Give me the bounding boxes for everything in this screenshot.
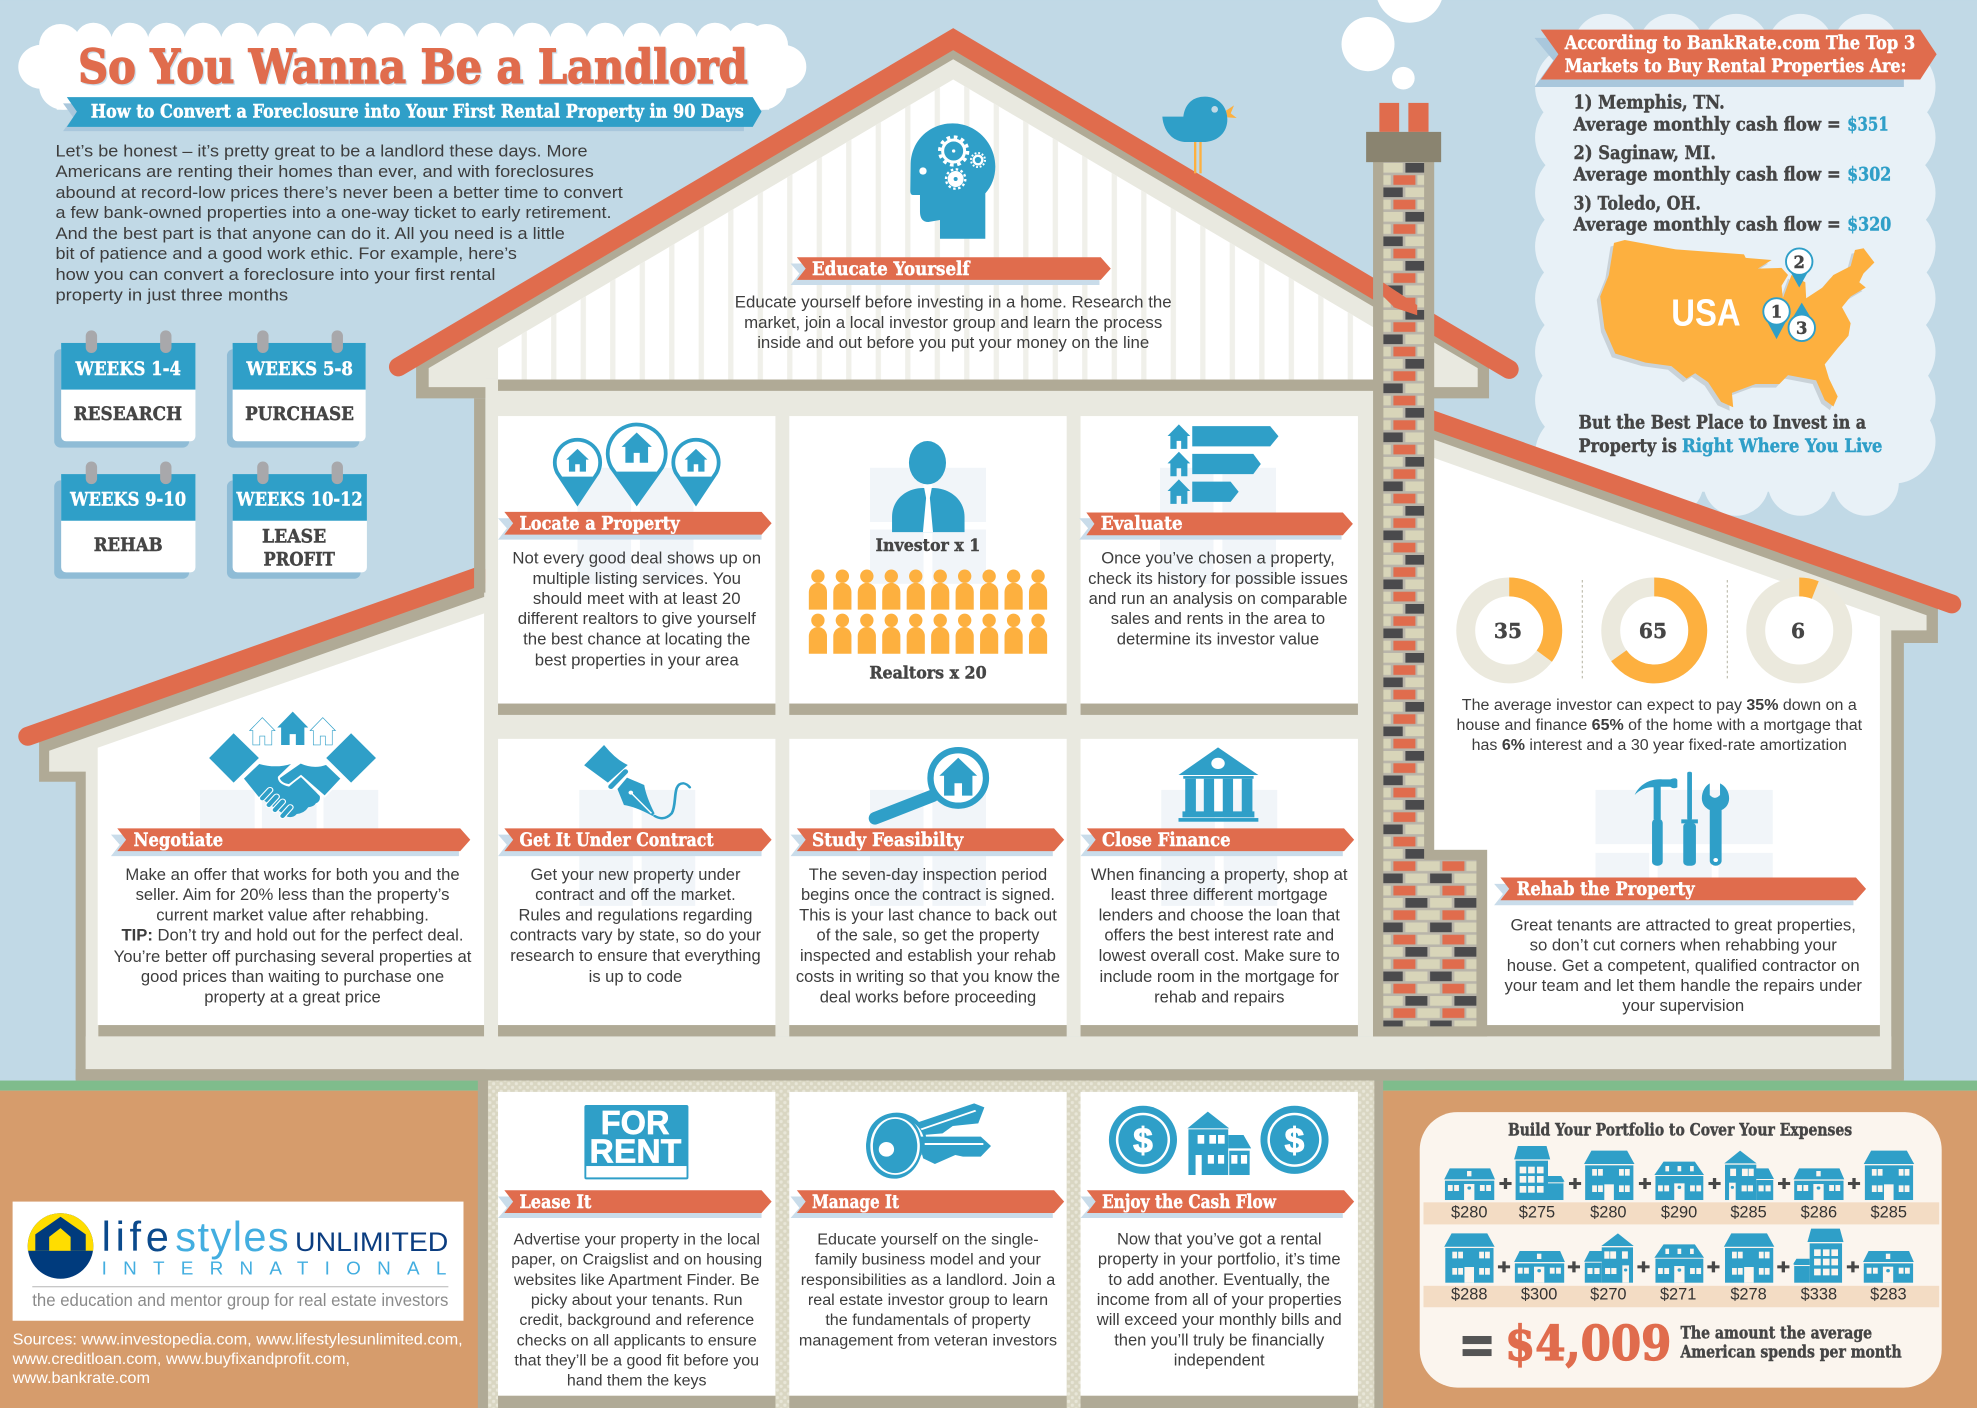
- text: best place to invest: Property is: [1579, 435, 1677, 457]
- ribbon: lease it: [498, 1190, 772, 1218]
- smoke puffs: [1342, 0, 1444, 90]
- ribbon: educate yourself: Educate Yourself: [812, 259, 971, 280]
- logo: lifestyles unlimited: the education and mentor group for real estate investors: [32, 1290, 449, 1310]
- text: negotiate: good prices than waiting to purchase one: [141, 967, 444, 986]
- cloud: top markets background: [1535, 14, 1936, 516]
- icon: keys: [866, 1103, 991, 1179]
- list: markets and cash flow: Average monthly cash flow =: [1573, 163, 1841, 185]
- donut: 6: 6: [1791, 619, 1805, 643]
- icon: for rent sign: FOR: [601, 1105, 670, 1142]
- donut: 35: 35: [1494, 619, 1522, 643]
- text: manage it: real estate investor group to learn: [808, 1291, 1048, 1309]
- pin: 2: [1786, 248, 1812, 287]
- prices: row two: $283: [1870, 1285, 1907, 1303]
- logo: lifestyles unlimited: [13, 1202, 463, 1321]
- text: close finance: rehab and repairs: [1154, 987, 1284, 1006]
- prices: row one: $280: [1590, 1203, 1627, 1221]
- text: negotiate: current market value after rehabbing.: [156, 905, 429, 924]
- ribbon: top markets heading: [1534, 30, 1937, 87]
- title cloud: [18, 23, 806, 110]
- ribbon: get it under contract: [498, 828, 772, 856]
- text: lease it: hand them the keys: [567, 1373, 707, 1390]
- text: best place to invest: Right Where You Live: [1682, 435, 1882, 457]
- prices: row two: $271: [1660, 1285, 1696, 1303]
- calendar: weeks 1-4 research: [54, 330, 195, 448]
- panel: lease it: [498, 1092, 775, 1408]
- subtitle ribbon: How to Convert a Foreclosure into Your First Rental Property in 90 Days: [91, 101, 744, 122]
- calendar: weeks 10-12 lease profit: PROFIT: [264, 549, 335, 571]
- house: right wing: [1425, 417, 1952, 1079]
- calendar: weeks 1-4 research: WEEKS 1-4: [75, 358, 181, 380]
- text: get it under contract: contract and off the market.: [535, 886, 736, 904]
- panel: educate yourself: [735, 123, 1172, 352]
- text: mortgage explanation: has 6% interest and a 30 year fixed-rate amortization: [1472, 737, 1847, 754]
- panel: enjoy the cash flow: [1081, 1092, 1358, 1408]
- text: enjoy the cash flow: Now that you’ve got a rental: [1117, 1230, 1322, 1248]
- text: enjoy the cash flow: then you’ll truly be financially: [1114, 1331, 1325, 1349]
- icon: location pins: [555, 424, 719, 506]
- text: evaluate: sales and rents in the area to: [1111, 609, 1325, 628]
- total: equals $4,009: $4,009: [1505, 1316, 1671, 1372]
- text: educate yourself: Educate yourself before investing in a home. Research the: [735, 293, 1172, 312]
- ribbon: educate yourself: [791, 257, 1111, 285]
- icon: bird: [1162, 97, 1237, 173]
- icon: coins and house: $: [1285, 1121, 1305, 1160]
- logo: lifestyles unlimited: life: [102, 1213, 169, 1260]
- pin: 2: 2: [1794, 253, 1805, 272]
- icon: head with gears: [910, 123, 995, 239]
- text: locate a property: the best chance at locating the: [523, 629, 750, 648]
- panel: top rental markets: [1534, 30, 1937, 457]
- ribbon: study feasibility: Study Feasibilty: [812, 830, 965, 851]
- text: educate yourself: inside and out before you put your money on the line: [757, 333, 1149, 352]
- text: rehab the property: your team and let them handle the repairs under: [1504, 976, 1862, 995]
- text: lease it: that they’ll be a good fit before you: [514, 1353, 759, 1370]
- prices: row one: $285: [1871, 1203, 1907, 1221]
- prices: row one: $280: [1451, 1203, 1487, 1221]
- text: mortgage explanation: house and finance 65% of the home with a mortgage that: [1456, 717, 1862, 734]
- list: markets and cash flow: $302: [1847, 163, 1891, 185]
- text: enjoy the cash flow: independent: [1174, 1352, 1265, 1370]
- panel: manage it: [789, 1092, 1067, 1408]
- prices: row two: $288: [1451, 1285, 1487, 1303]
- ribbon: manage it: [791, 1190, 1064, 1218]
- list: markets and cash flow: 3) Toledo, OH.: [1574, 192, 1701, 214]
- text: lease it: credit, background and reference: [519, 1312, 754, 1329]
- text: rehab the property: your supervision: [1622, 996, 1744, 1015]
- icon: hammer screwdriver wrench: [1635, 772, 1729, 866]
- map: usa: USA: [1671, 292, 1741, 334]
- label: realtors x 20: Realtors x 20: [869, 663, 987, 683]
- pin: 3: 3: [1796, 319, 1807, 338]
- total: equals $4,009: American spends per month: [1680, 1343, 1902, 1362]
- panel: down payment donuts: [1456, 580, 1863, 754]
- title: So You Wanna Be a Landlord: [78, 40, 748, 95]
- panel: get it under contract: [498, 739, 775, 1036]
- calendar: weeks 5-8 purchase: [227, 330, 366, 448]
- intro text: how you can convert a foreclosure into your first rental: [55, 265, 496, 284]
- ribbon: enjoy the cash flow: Enjoy the Cash Flow: [1102, 1192, 1277, 1213]
- icon: for rent sign: RENT: [590, 1134, 682, 1171]
- text: study feasibility: costs in writing so that you know the: [796, 968, 1060, 986]
- icon: twenty realtors: [809, 570, 1047, 654]
- text: evaluate: check its history for possible issues: [1088, 569, 1348, 588]
- text: lease it: Advertise your property in the local: [514, 1231, 760, 1248]
- text: manage it: management from veteran investors: [799, 1331, 1057, 1349]
- text: negotiate: property at a great price: [204, 987, 381, 1006]
- text: close finance: include room in the mortgage for: [1100, 967, 1339, 986]
- calendar: weeks 5-8 purchase: PURCHASE: [245, 403, 354, 425]
- house: main gable and walls: [398, 39, 1509, 1036]
- text: close finance: lenders and choose the loan that: [1099, 905, 1340, 924]
- text: locate a property: Not every good deal shows up on: [512, 549, 761, 568]
- text: best place to invest: But the Best Place to Invest in a: [1579, 412, 1866, 434]
- house: base band: [76, 1036, 1904, 1081]
- text: close finance: offers the best interest rate and: [1104, 926, 1334, 945]
- text: educate yourself: market, join a local investor group and learn the process: [744, 313, 1162, 332]
- house: left wing: [28, 576, 498, 1079]
- text: negotiate: seller. Aim for 20% less than the property’s: [136, 885, 449, 904]
- calendar: weeks 9-10 rehab: WEEKS 9-10: [69, 489, 186, 511]
- label: investor x 1: Investor x 1: [876, 536, 980, 556]
- calendar: weeks 9-10 rehab: REHAB: [94, 534, 163, 556]
- text: study feasibility: inspected and establish your rehab: [800, 947, 1056, 965]
- sources: www.bankrate.com: [12, 1370, 150, 1387]
- text: get it under contract: is up to code: [589, 968, 682, 986]
- text: negotiate: TIP: Don’t try and hold out for the perfect deal.: [122, 926, 463, 945]
- text: lease it: picky about your tenants. Run: [531, 1292, 743, 1309]
- panel: build your portfolio: [1420, 1112, 1942, 1388]
- intro text: a few bank-owned properties into a one-way ticket to early retirement.: [55, 203, 612, 222]
- basement walls: [478, 1081, 1383, 1408]
- total: equals $4,009: [1463, 1316, 1902, 1372]
- text: mortgage explanation: The average investor can expect to pay 35% down on a: [1462, 697, 1857, 714]
- list: markets and cash flow: $351: [1847, 114, 1889, 136]
- chimney: [1366, 103, 1487, 1036]
- calendar: weeks 1-4 research: RESEARCH: [74, 403, 182, 425]
- prices: row two: $278: [1730, 1285, 1767, 1303]
- ribbon: top markets heading: Markets to Buy Rental Properties Are:: [1565, 55, 1906, 77]
- text: negotiate: Make an offer that works for both you and the: [125, 865, 460, 884]
- ribbon: study feasibility: [791, 828, 1064, 856]
- icon: coins and house: $: [1133, 1121, 1153, 1160]
- ribbon: locate a property: [498, 512, 772, 540]
- donut: 65: 65: [1639, 619, 1667, 643]
- ribbon: manage it: Manage It: [812, 1192, 899, 1213]
- ribbon: negotiate: [111, 828, 470, 856]
- icon: handshake with houses: [209, 712, 376, 817]
- ribbon: evaluate: Evaluate: [1101, 514, 1183, 535]
- text: locate a property: best properties in your area: [535, 651, 739, 670]
- map: usa: [1597, 240, 1874, 411]
- icon: logo emblem: [28, 1213, 93, 1279]
- icon: ranked houses: [1168, 424, 1278, 504]
- intro text: property in just three months: [55, 286, 288, 305]
- text: manage it: Educate yourself on the single-: [817, 1230, 1039, 1248]
- text: locate a property: different realtors to give yourself: [518, 609, 756, 628]
- pin: 1: [1763, 298, 1790, 339]
- pin: 3: [1789, 303, 1815, 341]
- ribbon: get it under contract: Get It Under Contract: [519, 830, 714, 851]
- subtitle ribbon: [63, 97, 762, 131]
- intro text: Americans are renting their homes than ever, and with foreclosures: [55, 162, 594, 181]
- text: study feasibility: deal works before proceeding: [820, 988, 1036, 1006]
- price bands: [1423, 1202, 1939, 1307]
- calendar: weeks 5-8 purchase: WEEKS 5-8: [246, 358, 353, 380]
- text: enjoy the cash flow: income from all of your properties: [1097, 1291, 1342, 1309]
- sources: Sources: www.investopedia.com, www.lifestylesunlimited.com,: [13, 1332, 463, 1349]
- houses: rows: [1444, 1146, 1914, 1283]
- text: get it under contract: Get your new property under: [530, 866, 741, 884]
- text: rehab the property: so don’t cut corners when rehabbing your: [1530, 936, 1837, 955]
- text: locate a property: multiple listing services. You: [532, 569, 741, 588]
- text: study feasibility: begins once the contract is signed.: [801, 886, 1055, 904]
- ribbon: close finance: Close Finance: [1102, 830, 1231, 851]
- prices: row one: $275: [1519, 1203, 1555, 1221]
- ribbon: rehab the property: Rehab the Property: [1517, 879, 1696, 900]
- pin: 1: 1: [1771, 303, 1782, 322]
- intro text: And the best part is that anyone can do it. All you need is a little: [55, 224, 565, 243]
- list: markets and cash flow: $320: [1847, 213, 1891, 235]
- donut: 65: [1611, 587, 1698, 674]
- intro text: abound at record-low prices there’s never been a better time to convert: [55, 183, 623, 202]
- text: manage it: the fundamentals of property: [825, 1311, 1032, 1329]
- text: locate a property: should meet with at least 20: [533, 589, 741, 608]
- heading: build your portfolio: Build Your Portfolio to Cover Your Expenses: [1508, 1120, 1852, 1139]
- text: enjoy the cash flow: will exceed your monthly bills and: [1096, 1311, 1342, 1329]
- text: close finance: When financing a property, shop at: [1091, 865, 1348, 884]
- text: get it under contract: Rules and regulations regarding: [519, 906, 752, 924]
- logo: lifestyles unlimited: UNLIMITED: [295, 1227, 448, 1257]
- text: enjoy the cash flow: to add another. Eventually, the: [1108, 1271, 1330, 1289]
- text: study feasibility: The seven-day inspection period: [809, 866, 1047, 884]
- prices: row one: $290: [1661, 1203, 1697, 1221]
- text: get it under contract: contracts vary by state, so do your: [510, 927, 762, 945]
- text: best place to invest: [1579, 412, 1882, 457]
- text: manage it: family business model and your: [815, 1251, 1042, 1269]
- text: rehab the property: Great tenants are attracted to great properties,: [1511, 916, 1856, 935]
- prices: row two: [1451, 1285, 1907, 1303]
- ribbon: lease it: Lease It: [519, 1192, 592, 1213]
- icon: coins and house: [1109, 1106, 1329, 1175]
- text: negotiate: You’re better off purchasing several properties at: [114, 947, 472, 966]
- text: close finance: least three different mortgage: [1111, 885, 1328, 904]
- ribbon: locate a property: Locate a Property: [519, 514, 681, 535]
- prices: row two: $338: [1801, 1285, 1837, 1303]
- list: markets and cash flow: 1) Memphis, TN.: [1574, 91, 1725, 113]
- panel: close finance: [1081, 739, 1358, 1036]
- panel: locate a property: [498, 416, 775, 715]
- text: manage it: responsibilities as a landlord. Join a: [801, 1271, 1055, 1289]
- text: close finance: lowest overall cost. Make sure to: [1099, 946, 1340, 965]
- list: markets and cash flow: Average monthly cash flow =: [1573, 114, 1841, 136]
- text: rehab the property: house. Get a competent, qualified contractor on: [1507, 956, 1860, 975]
- panel: negotiate: [111, 712, 472, 1006]
- panel: study feasibility: [789, 739, 1067, 1036]
- text: evaluate: and run an analysis on comparable: [1089, 589, 1347, 608]
- icon: fountain pen: [584, 745, 690, 818]
- text: enjoy the cash flow: property in your portfolio, it’s time: [1098, 1251, 1341, 1269]
- sources: www.creditloan.com, www.buyfixandprofit.com,: [12, 1351, 350, 1368]
- prices: row one: $286: [1801, 1203, 1837, 1221]
- donut: 6: [1756, 587, 1843, 674]
- icon: magnifying glass: [875, 750, 986, 818]
- ground: [0, 1081, 1977, 1408]
- logo: lifestyles unlimited: styles: [175, 1213, 289, 1260]
- ribbon: enjoy the cash flow: [1081, 1190, 1354, 1218]
- text: get it under contract: research to ensure that everything: [510, 947, 761, 965]
- panel: evaluate: [1079, 416, 1358, 715]
- intro text: bit of patience and a good work ethic. For example, here’s: [55, 244, 517, 263]
- logo: lifestyles unlimited: INTERNATIONAL: [102, 1258, 446, 1279]
- panel: rehab the property: [1494, 772, 1866, 1015]
- ribbon: rehab the property: [1494, 878, 1866, 905]
- ribbon: negotiate: Negotiate: [134, 830, 223, 851]
- panel: investor and realtors: [789, 416, 1067, 715]
- prices: row two: $270: [1590, 1285, 1627, 1303]
- list: markets and cash flow: Average monthly cash flow =: [1573, 213, 1841, 235]
- icon: investor: [892, 441, 965, 532]
- icon: bank: [1179, 747, 1258, 822]
- prices: row one: [1451, 1203, 1907, 1221]
- ribbon: evaluate: [1079, 513, 1353, 540]
- donut: 35: [1466, 587, 1553, 674]
- icon: for rent sign: [584, 1105, 688, 1179]
- total: equals $4,009: The amount the average: [1680, 1323, 1872, 1342]
- text: evaluate: Once you’ve chosen a property,: [1101, 549, 1335, 568]
- calendar: weeks 10-12 lease profit: WEEKS 10-12: [236, 489, 363, 511]
- text: lease it: checks on all applicants to ensure: [517, 1332, 757, 1349]
- prices: row one: $285: [1730, 1203, 1767, 1221]
- text: lease it: websites like Apartment Finder. Be: [513, 1272, 760, 1289]
- ribbon: close finance: [1081, 828, 1354, 856]
- prices: row two: $300: [1521, 1285, 1557, 1303]
- calendar: weeks 10-12 lease profit: [227, 461, 367, 579]
- calendar: weeks 9-10 rehab: [54, 461, 195, 579]
- text: study feasibility: This is your last chance to back out: [799, 906, 1057, 924]
- list: markets and cash flow: 2) Saginaw, MI.: [1574, 142, 1716, 164]
- text: study feasibility: of the sale, so get the property: [817, 927, 1040, 945]
- text: evaluate: determine its investor value: [1117, 629, 1319, 648]
- intro text: Let’s be honest – it’s pretty great to be a landlord these days. More: [55, 141, 588, 160]
- ribbon: top markets heading: According to BankRate.com The Top 3: [1564, 32, 1915, 54]
- list: markets and cash flow: [1573, 91, 1891, 235]
- text: lease it: paper, on Craigslist and on housing: [511, 1252, 762, 1269]
- calendar: weeks 10-12 lease profit: LEASE: [262, 526, 326, 548]
